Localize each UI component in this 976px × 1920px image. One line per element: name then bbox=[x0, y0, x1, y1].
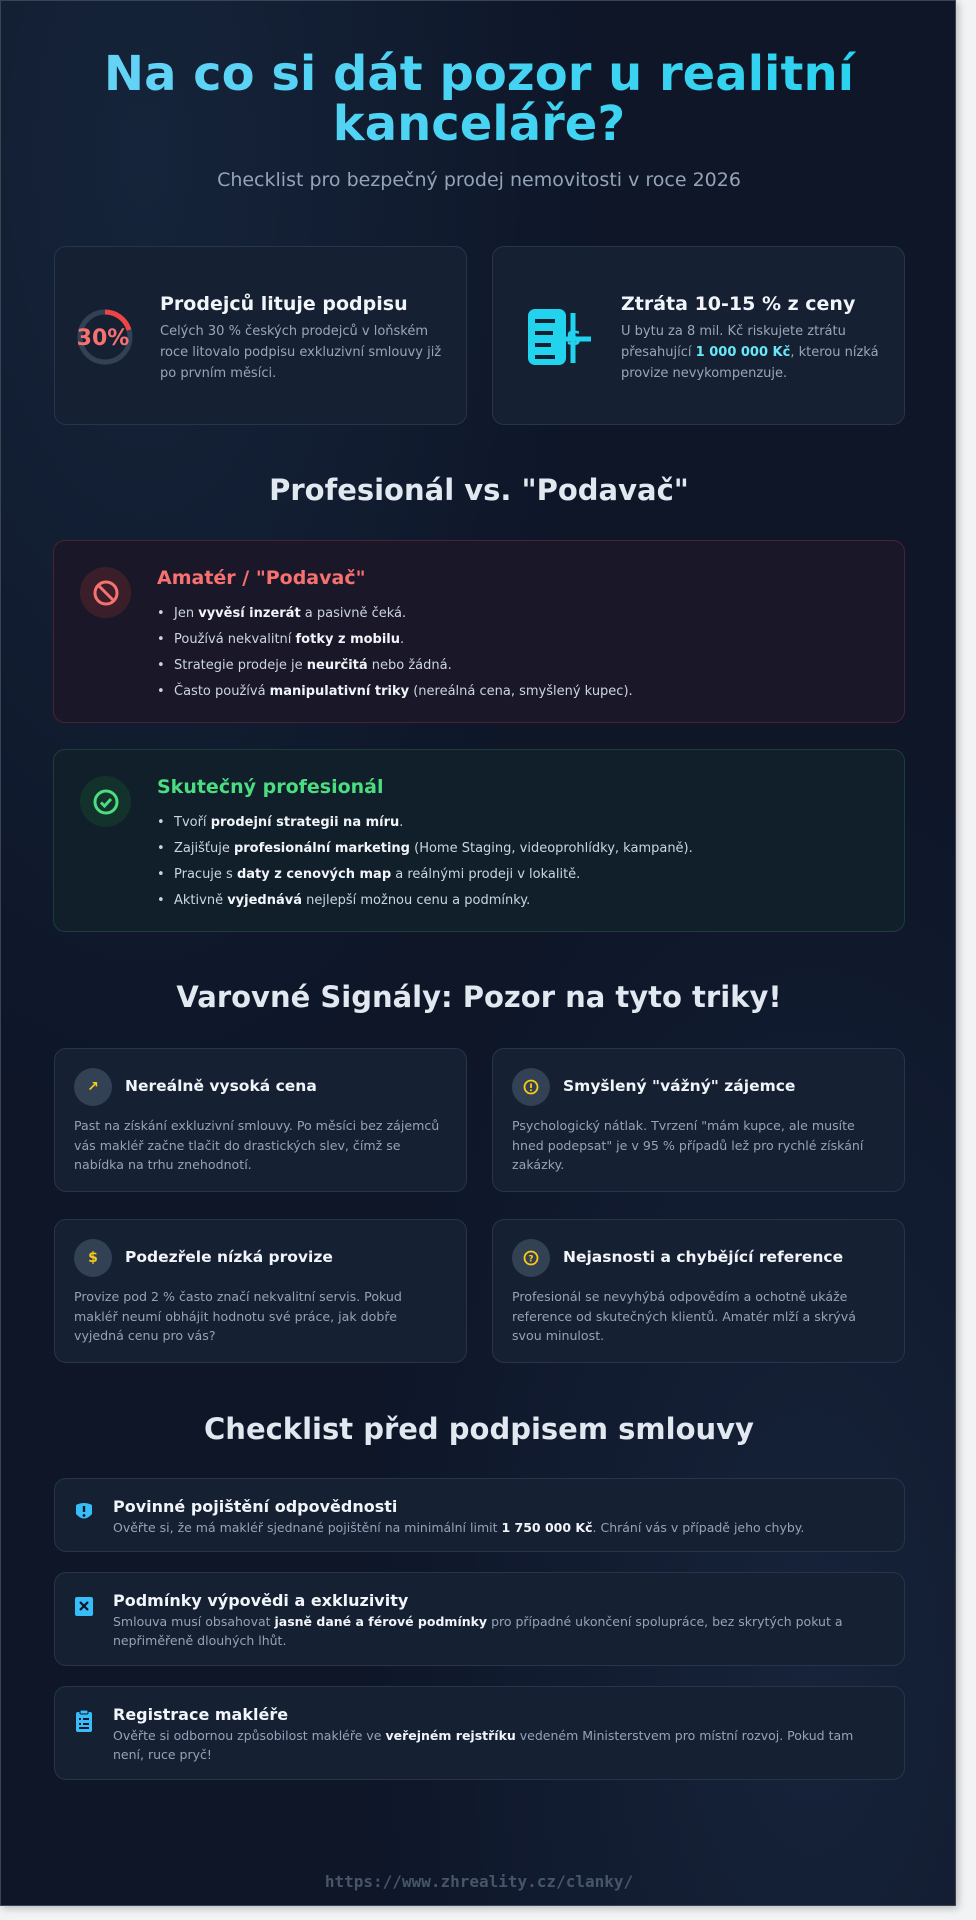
warning card: price: Nereálně vysoká cena bbox=[125, 1077, 317, 1095]
checklist item: insurance bbox=[54, 1478, 905, 1552]
warning card: low commission bbox=[54, 1219, 467, 1363]
icon: dollar bbox=[74, 1239, 112, 1277]
title: kanceláře? bbox=[333, 96, 625, 152]
warning card: fake buyer bbox=[492, 1048, 905, 1192]
list: Často používá manipulativní triky (nereálná cena, smyšlený kupec). bbox=[174, 684, 633, 699]
checklist item: termination: Smlouva musí obsahovat jasně dané a férové podmínky pro případné ukončení spolupráce, bez skrytých pokut a nepřiměřeně dlouhých lhůt. bbox=[113, 1614, 843, 1648]
stat text: Ztráta 10-15 % z ceny bbox=[621, 293, 855, 315]
icon: clipboard bbox=[76, 1710, 92, 1732]
stat card: loss bbox=[492, 246, 905, 425]
list: Pracuje s daty z cenových map a reálnými prodeji v lokalitě. bbox=[174, 867, 580, 882]
icon: alert bbox=[512, 1068, 550, 1106]
list: Používá nekvalitní fotky z mobilu. bbox=[174, 632, 404, 647]
list: Tvoří prodejní strategii na míru. bbox=[174, 815, 403, 830]
icon: x document bbox=[75, 1597, 93, 1616]
footer url: https://www.zhreality.cz/clanky/ bbox=[325, 1872, 633, 1891]
checklist item: termination: Podmínky výpovědi a exkluzivity bbox=[113, 1591, 408, 1610]
icon: check bbox=[80, 776, 131, 827]
warning card: low commission: Provize pod 2 % často značí nekvalitní servis. Pokud makléř neumí obhájit hodnotu své práce, jak dobře vyjedná cenu pro vás? bbox=[74, 1289, 402, 1343]
stat text bbox=[621, 293, 879, 381]
warning card: fake buyer: Smyšlený "vážný" zájemce bbox=[563, 1077, 795, 1095]
panel: amateur bbox=[53, 540, 905, 723]
icon: 30% gauge: 30% bbox=[77, 326, 129, 351]
checklist item: insurance: Povinné pojištění odpovědnosti bbox=[113, 1497, 397, 1516]
icon: 30% gauge bbox=[77, 310, 132, 364]
heading: Skutečný profesionál bbox=[157, 776, 384, 798]
warning card: low commission: Podezřele nízká provize bbox=[125, 1248, 333, 1266]
list: Zajišťuje profesionální marketing (Home Staging, videoprohlídky, kampaně). bbox=[174, 841, 693, 856]
icon: trend: ↗ bbox=[87, 1079, 99, 1095]
checklist item: registration bbox=[54, 1686, 905, 1780]
icon: document money bbox=[528, 309, 591, 365]
warning card: price: Past na získání exkluzivní smlouvy. Po měsíci bez zájemců vás makléř začne tlačit do drastických slev, čímž se bbox=[74, 1118, 439, 1152]
stat text bbox=[160, 293, 441, 381]
icon: shield bbox=[76, 1503, 92, 1518]
checklist item: registration: Ověřte si odbornou způsobilost makléře ve veřejném rejstříku vedeném Ministerstvem pro místní rozvoj. Pokud tam není, ruce pryč! bbox=[113, 1728, 853, 1762]
stat text: Prodejců lituje podpisu bbox=[160, 293, 408, 315]
icon: question bbox=[512, 1239, 550, 1277]
warning card: references bbox=[492, 1219, 905, 1363]
checklist item: termination bbox=[54, 1572, 905, 1666]
heading: warnings: Varovné Signály: Pozor na tyto triky! bbox=[176, 980, 782, 1014]
title bbox=[1, 49, 957, 149]
icon: question: ? bbox=[528, 1254, 534, 1264]
heading: comparison: Profesionál vs. "Podavač" bbox=[269, 473, 689, 507]
list bbox=[159, 606, 633, 699]
checklist item: insurance: Ověřte si, že má makléř sjednané pojištění na minimální limit 1 750 000 Kč. Chrání vás v případě jeho chyby. bbox=[113, 1520, 804, 1535]
icon: dollar: $ bbox=[88, 1250, 98, 1266]
warning card: references: Profesionál se nevyhýbá odpovědím a ochotně ukáže reference od skutečných klientů. Amatér mlží a skrývá svou minulost. bbox=[512, 1289, 856, 1343]
subtitle: Checklist pro bezpečný prodej nemovitosti v roce 2026 bbox=[217, 169, 741, 191]
stat card: 30% bbox=[54, 246, 467, 425]
list: Jen vyvěsí inzerát a pasivně čeká. bbox=[174, 606, 406, 621]
warning card: price: nabídka na trhu znehodnotí. bbox=[74, 1157, 252, 1172]
stat text: U bytu za 8 mil. Kč riskujete ztrátu přesahující 1 000 000 Kč, kterou nízká provize nevykompenzuje. bbox=[621, 324, 879, 381]
checklist item: registration: Registrace makléře bbox=[113, 1705, 288, 1724]
heading: checklist: Checklist před podpisem smlouvy bbox=[204, 1412, 754, 1446]
stat text: Celých 30 % českých prodejců v loňském roce litovalo podpisu exkluzivní smlouvy již po prvním měsíci. bbox=[160, 324, 441, 381]
panel: professional bbox=[53, 749, 905, 932]
list bbox=[159, 815, 693, 908]
list: Aktivně vyjednává nejlepší možnou cenu a podmínky. bbox=[174, 893, 530, 908]
heading: Amatér / "Podavač" bbox=[157, 567, 366, 589]
warning card: price bbox=[54, 1048, 467, 1192]
warning card: fake buyer: Psychologický nátlak. Tvrzení "mám kupce, ale musíte hned podepsat" je v 95 % případů lež pro rychlé získání zakázky. bbox=[512, 1118, 863, 1172]
list: Strategie prodeje je neurčitá nebo žádná. bbox=[174, 658, 452, 673]
warning card: references: Nejasnosti a chybějící reference bbox=[563, 1248, 843, 1266]
icon: document money: $ bbox=[566, 326, 581, 351]
title: Na co si dát pozor u realitní bbox=[104, 46, 854, 102]
icon: trend bbox=[74, 1068, 112, 1106]
icon: forbidden bbox=[80, 567, 131, 618]
